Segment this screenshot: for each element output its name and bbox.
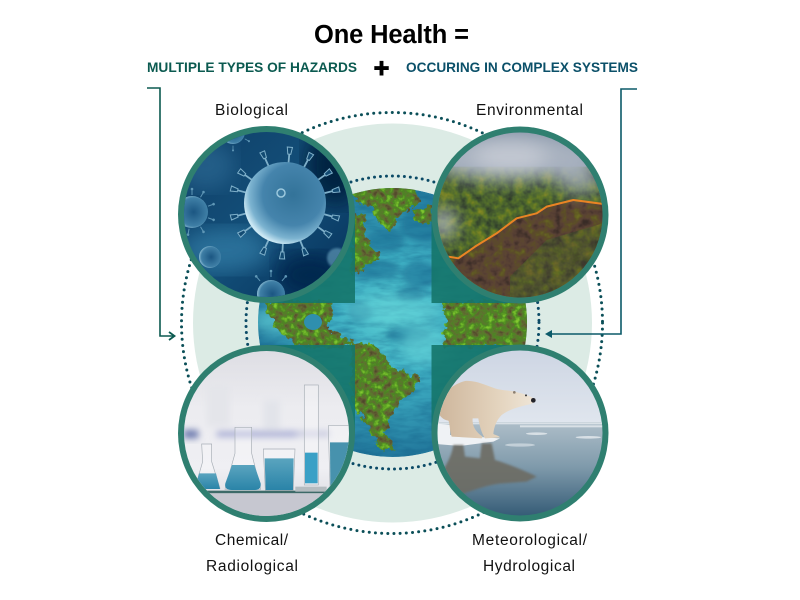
- teal corner: [432, 215, 520, 303]
- regrowth in lower right: [510, 223, 603, 300]
- graduated cylinder: [295, 385, 327, 492]
- panel: environmental: [423, 126, 608, 304]
- small virus bottom: [254, 270, 288, 297]
- ring: [178, 126, 355, 303]
- main virus: [230, 147, 340, 259]
- label: chemical / radiological: [206, 532, 298, 575]
- title: One Health =: [314, 21, 469, 49]
- background light circle: [193, 124, 592, 522]
- arrow: multiple hazards bracket: [147, 88, 174, 340]
- ring: [432, 126, 608, 304]
- blurred lab backdrop: [184, 405, 330, 444]
- laboratory photo: [180, 348, 355, 520]
- ring: [178, 345, 355, 522]
- burned ground: [448, 201, 602, 298]
- virus photo: [184, 132, 349, 297]
- green canopy: [433, 167, 607, 300]
- fire line: [448, 200, 603, 258]
- label: biological: Biological: [215, 102, 288, 119]
- outer dotted ring: [182, 112, 602, 534]
- teal corner: [266, 214, 355, 303]
- ring: [432, 344, 608, 522]
- label: environmental: Environmental: [476, 102, 583, 119]
- gulf of mexico water: [304, 314, 322, 330]
- large flask: [225, 427, 261, 490]
- shelf and table: [207, 490, 326, 494]
- teal corner: [432, 345, 520, 433]
- label: meteorological / hydrological: Hydrological: [483, 558, 575, 575]
- subheading: multiple types of hazards: MULTIPLE TYPES OF HAZARDS: [147, 59, 357, 75]
- ice floe: [435, 423, 500, 446]
- small flask: [195, 444, 220, 489]
- polar bear: [437, 381, 536, 438]
- label: meteorological / hydrological: [472, 532, 588, 575]
- small virus lower left: [199, 246, 221, 268]
- subheading: occuring in complex systems: OCCURING IN COMPLEX SYSTEMS: [406, 59, 638, 75]
- beaker: [263, 449, 295, 490]
- panel: chemical / radiological: [178, 345, 355, 522]
- plus sign: +: [374, 53, 389, 83]
- panel: biological: [178, 126, 355, 303]
- ocean bright patches: [250, 296, 449, 365]
- label: chemical / radiological: Radiological: [206, 558, 298, 575]
- small virus right: [326, 247, 342, 266]
- teal corner: [266, 345, 355, 434]
- ocean dark patches: [346, 208, 432, 346]
- label: meteorological / hydrological: Meteorological/: [472, 532, 588, 549]
- polar bear photo: [435, 348, 605, 522]
- label: chemical / radiological: Chemical/: [215, 532, 289, 549]
- small virus left: [184, 188, 215, 236]
- panel: meteorological / hydrological: [432, 344, 608, 522]
- wildfire photo: [423, 130, 607, 300]
- continents: [263, 185, 533, 452]
- globe: [250, 185, 533, 458]
- right beaker: [328, 426, 352, 487]
- inner dotted ring: [246, 176, 539, 469]
- smoke: [423, 133, 603, 238]
- bear reflection: [443, 443, 537, 495]
- small virus top: [226, 135, 250, 152]
- distant ice: [437, 422, 603, 447]
- arrow: complex systems bracket: [545, 89, 637, 338]
